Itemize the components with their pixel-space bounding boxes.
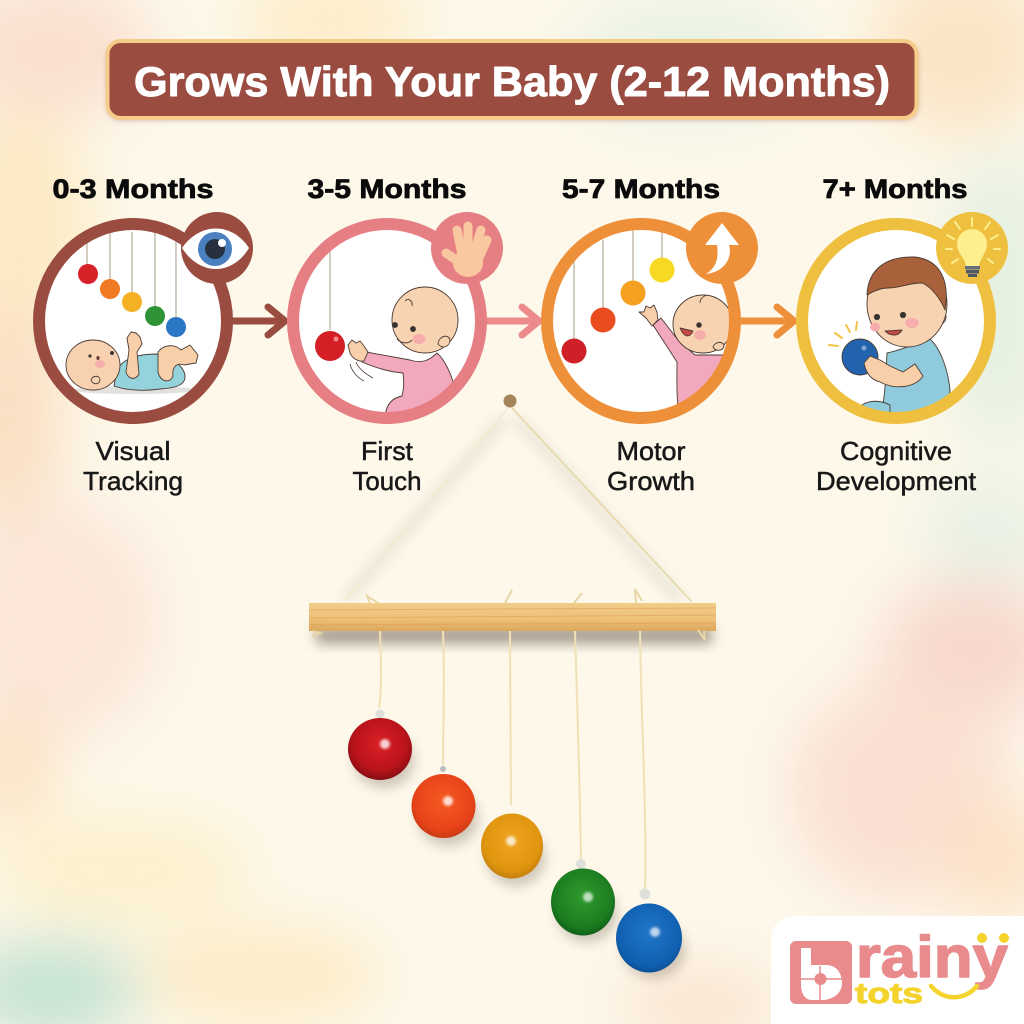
logo mark: letter b	[790, 941, 852, 1004]
illustration: baby reaching	[348, 286, 458, 412]
stage headings	[52, 174, 968, 204]
logo panel: brainy tots	[771, 916, 1024, 1024]
stage labels: Visual	[96, 436, 170, 466]
arrow: stage 2 to 3	[485, 307, 539, 335]
stage labels	[83, 436, 977, 496]
icon: light bulb	[936, 212, 1008, 284]
stage headings: 5-7 Months	[562, 174, 720, 204]
stage labels: Growth	[607, 466, 695, 496]
stage labels: Touch	[352, 466, 422, 496]
stage labels: Motor	[616, 436, 686, 466]
wooden balls	[348, 710, 682, 972]
logo umlaut dots	[977, 933, 1009, 943]
panel: stage 2 first touch	[293, 212, 503, 420]
icon: growth arrow	[686, 212, 758, 284]
stage labels: Cognitive	[840, 436, 952, 466]
panel: stage 1 visual tracking	[39, 212, 253, 418]
illustration: four balls	[562, 230, 674, 364]
illustration: baby lying on back	[66, 332, 198, 394]
icon: eye	[181, 212, 253, 284]
stage headings: 7+ Months	[822, 174, 968, 204]
illustration: hanging balls	[78, 232, 186, 337]
illustration: baby reaching up	[638, 294, 729, 404]
arrow: stage 3 to 4	[741, 307, 794, 335]
stage labels: Development	[816, 466, 977, 496]
stage labels: Tracking	[83, 466, 183, 496]
title banner	[107, 41, 918, 120]
panel: stage 4 cognitive development	[802, 212, 1008, 420]
arrow: stage 1 to 2	[232, 307, 285, 335]
logo wordmark: rainy	[856, 925, 1008, 990]
cords	[379, 631, 645, 893]
hanging string and peg	[345, 394, 692, 602]
panel: stage 3 motor growth	[547, 212, 758, 420]
logo sub-wordmark: tots	[855, 978, 923, 1010]
stage labels: First	[361, 436, 414, 466]
icon: hand	[431, 212, 503, 284]
wooden bar	[309, 589, 716, 644]
illustration: red ball on string	[315, 251, 345, 361]
illustration: sparkle lines	[829, 322, 857, 346]
illustration: child holding ball	[842, 257, 950, 420]
stage headings: 0-3 Months	[52, 174, 214, 204]
logo smile	[931, 986, 977, 997]
product: wooden hanging mobile	[309, 394, 716, 978]
title banner: Grows With Your Baby (2-12 Months)	[134, 58, 890, 105]
ball shadows	[354, 732, 685, 978]
stage headings: 3-5 Months	[308, 174, 466, 204]
